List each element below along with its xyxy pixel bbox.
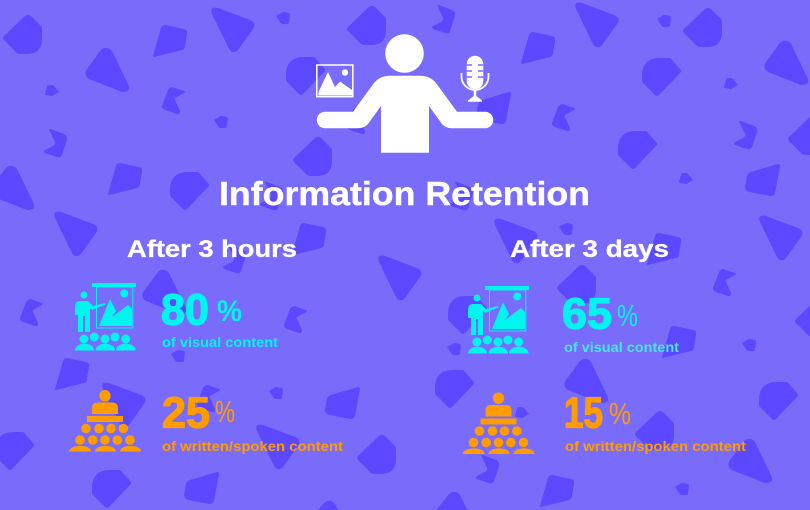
stat: 25 percent written: %	[215, 394, 235, 429]
stat: 65 percent visual: 65	[562, 290, 612, 338]
icon: presenter audience, hours	[75, 283, 136, 350]
heading: after 3 hours: After 3 hours	[127, 236, 297, 263]
stat: 80 percent visual	[161, 286, 279, 350]
icon: lecturer audience, days	[462, 392, 534, 454]
stat: 65 percent visual: of visual content	[564, 340, 680, 355]
stat: 15 percent written: 15	[564, 388, 603, 438]
stat: 80 percent visual: %	[217, 295, 242, 328]
stat: 15 percent written: %	[609, 396, 631, 431]
stat: 65 percent visual: %	[617, 298, 638, 333]
stat: 25 percent written	[162, 388, 344, 454]
icon: picture	[317, 65, 353, 97]
stat: 65 percent visual	[562, 290, 680, 355]
stat: 25 percent written: of written/spoken content	[162, 439, 344, 454]
heading: after 3 days: After 3 days	[510, 236, 669, 263]
stat: 80 percent visual: 80	[161, 286, 209, 334]
stat: 15 percent written: of written/spoken content	[565, 439, 747, 454]
stat: 80 percent visual: of visual content	[162, 335, 279, 350]
icon: lecturer audience, hours	[69, 390, 141, 452]
title: Information Retention	[219, 175, 590, 212]
icon: microphone	[462, 56, 488, 102]
stat: 25 percent written: 25	[162, 388, 210, 438]
stat: 15 percent written	[564, 388, 747, 454]
icon: presenter audience, days	[468, 286, 529, 354]
icon: person with open hands	[317, 34, 493, 153]
